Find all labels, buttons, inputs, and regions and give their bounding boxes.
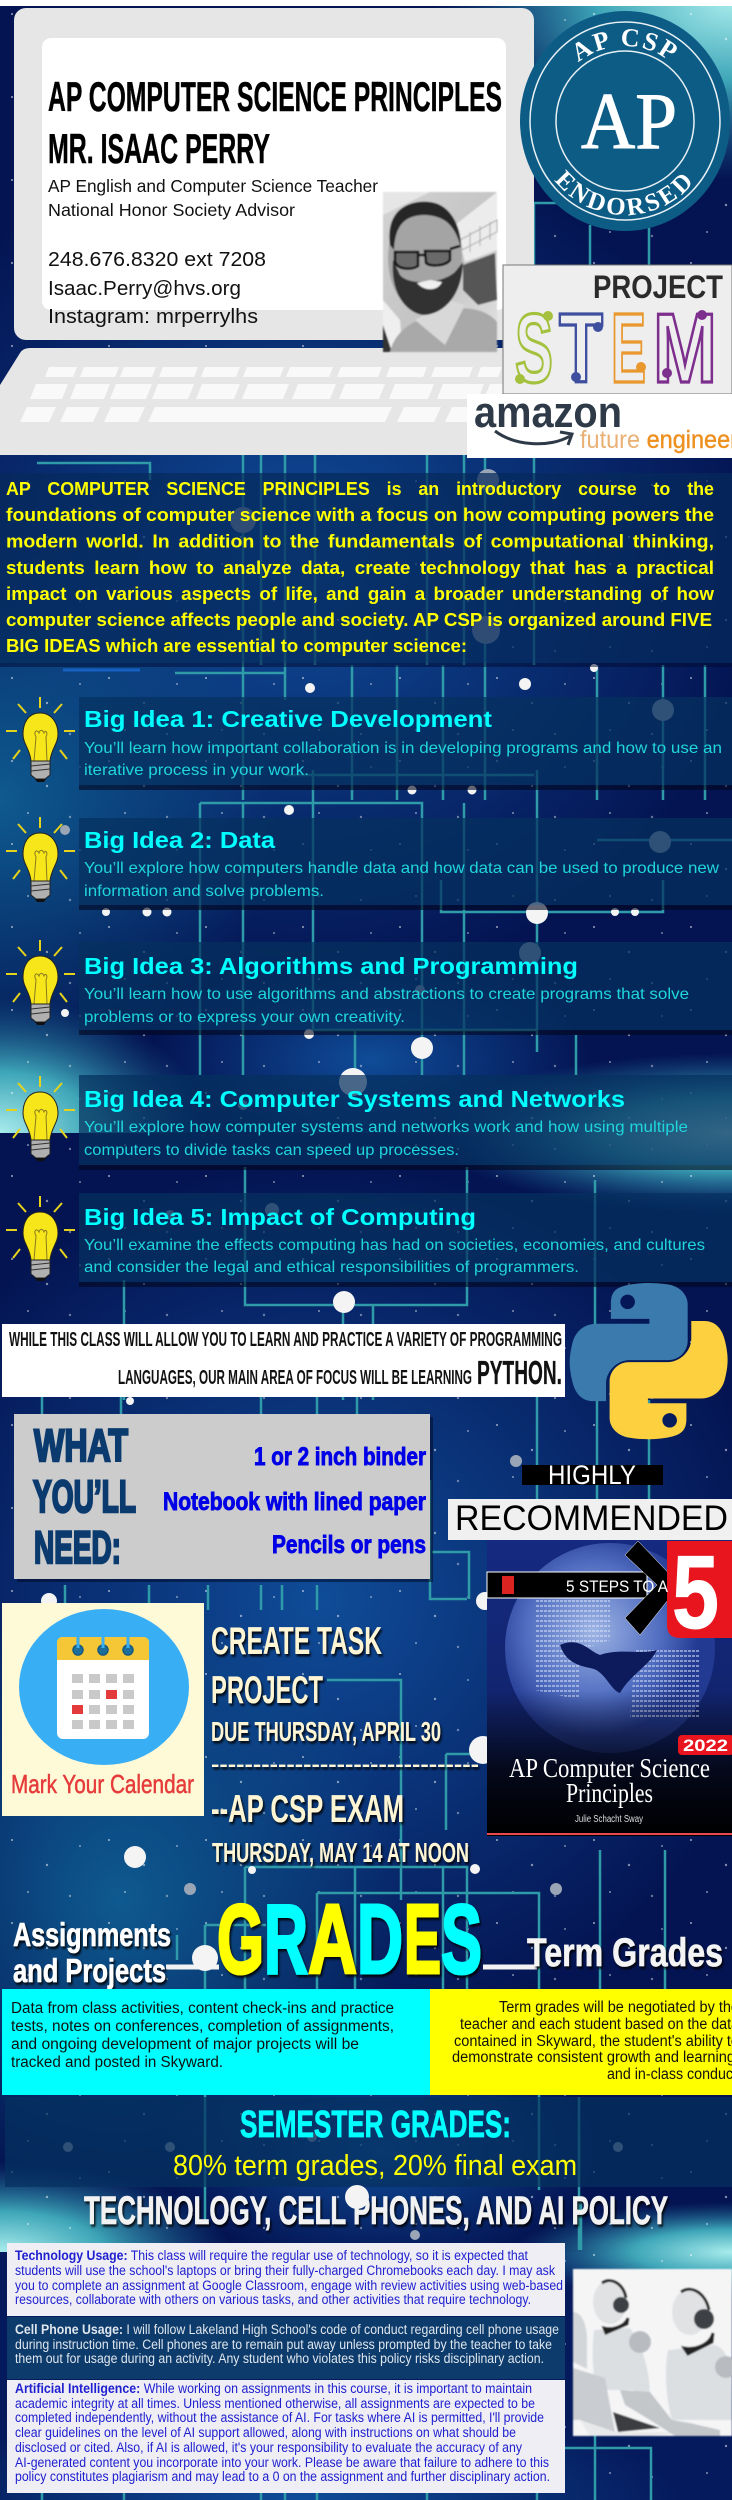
laptop screen inner white area	[42, 38, 506, 310]
heading: grades: D	[357, 1884, 403, 1994]
logo text: STEM letters: E	[611, 293, 646, 403]
panel: course introduction	[0, 473, 732, 667]
list: supplies: Pencils or pens	[272, 1531, 426, 1559]
panel: Python statement: LANGUAGES, OUR MAIN AREA OF FOCUS WILL BE LEARNING	[118, 1367, 472, 1389]
heading: Big Idea 3: Big Idea 3: Algorithms and Programming	[84, 953, 578, 979]
text block: key dates: THURSDAY, MAY 14 AT NOON	[212, 1837, 469, 1868]
text: Big Idea 5 description	[84, 1237, 705, 1276]
panel: laptop illustration	[0, 8, 540, 455]
text: Big Idea 1 description: iterative process in your work.	[84, 762, 309, 779]
heading: what you'll need: YOU’LL	[33, 1471, 136, 1522]
text: Big Idea 1 description: You’ll learn how important collaboration is in developing programs and how to use an	[84, 740, 722, 757]
panel: Big Idea 3	[6, 940, 732, 1035]
heading: Big Idea 2: Big Idea 2: Data	[84, 827, 275, 853]
panel: cell phone usage	[7, 2317, 565, 2379]
panel: course introduction: computer science affects people and society. AP CSP is organized around FIVE	[6, 610, 712, 630]
heading: Big Idea 4: Big Idea 4: Computer Systems and Networks	[84, 1086, 625, 1112]
list: supplies: 1 or 2 inch binder	[254, 1443, 426, 1471]
robot one	[593, 2280, 651, 2395]
panel: technology usage: you to complete an assignment at Google Classroom, engage with review activities using web-based	[15, 2278, 563, 2293]
logo dots	[515, 310, 707, 384]
heading: what you'll need: NEED:	[34, 1522, 121, 1573]
book year tag: 2022	[683, 1736, 728, 1755]
list: supplies	[163, 1443, 426, 1559]
text block: teacher contact details: 248.676.8320 ext 7208	[48, 249, 266, 271]
panel: what you'll need	[14, 1414, 433, 1582]
icon: light bulb	[6, 940, 75, 1025]
panel: Python statement	[2, 1324, 565, 1397]
badge text: AP CSP: AP CSP	[576, 29, 677, 62]
panel: technology usage: resources, collaborate with others on various tasks, and other activities that require technology.	[15, 2292, 531, 2307]
icon: light bulb	[6, 817, 75, 902]
panel: Big Idea 5	[6, 1193, 732, 1287]
panel: artificial intelligence: Artificial Intelligence: While working on assignments in this course, it is important to maintain	[15, 2381, 532, 2396]
heading: grades	[217, 1884, 482, 1994]
label: highly	[522, 1460, 663, 1490]
heading: grades: R	[264, 1884, 308, 1994]
panel: artificial intelligence: policy constitutes plagiarism and may lead to a 0 on the assignment and further disciplinary action.	[15, 2469, 550, 2484]
text: Big Idea 4 description: computers to divide tasks can speed up processes.	[84, 1142, 459, 1159]
heading: what you'll need	[33, 1420, 136, 1573]
list: supplies: Notebook with lined paper	[163, 1488, 426, 1516]
text: Big Idea 4 description	[84, 1119, 688, 1159]
panel: term grades	[430, 1989, 732, 2095]
icon: light bulb	[6, 697, 75, 782]
panel: assignments and projects: Data from class activities, content check-ins and practice	[11, 2000, 394, 2017]
panel: cell phone usage: them out for usage during an activity. Any student who violates this policy risks disciplinary action.	[15, 2351, 544, 2366]
text: Big Idea 1 description	[84, 740, 722, 779]
text: Big Idea 3 description	[84, 986, 689, 1026]
book title: Principles	[566, 1778, 653, 1808]
icon: light bulb	[6, 1076, 75, 1161]
book text: 5 steps to a: 5 STEPS TO A	[566, 1577, 669, 1596]
text: Big Idea 5 description: You’ll examine the effects computing has had on societies, economies, and cultures	[84, 1237, 705, 1254]
text: mark your calendar: Mark Your Calendar	[11, 1769, 194, 1799]
panel: artificial intelligence: disclosed or cited. Also, if AI is allowed, it's your responsibility to evaluate the accuracy of any	[15, 2440, 522, 2455]
heading: semester grades: SEMESTER GRADES:	[240, 2104, 511, 2146]
badge: AP CSP endorsed	[520, 11, 730, 231]
heading: assignments and projects: Assignments	[13, 1916, 171, 1953]
text block: teacher contact details	[48, 176, 378, 328]
book cover: 5 Steps to a 5	[487, 1535, 732, 1836]
book author: Julie Schacht Sway	[575, 1814, 643, 1825]
label: recommended: RECOMMENDED	[455, 1499, 728, 1538]
text block: teacher contact details: National Honor Society Advisor	[48, 200, 295, 220]
book number: 5: 5	[672, 1535, 719, 1651]
panel: course introduction: modern world. In addition to the fundamentals of computational thinking,	[6, 532, 714, 552]
panel: course introduction: BIG IDEAS which are essential to computer science:	[6, 636, 467, 656]
panel: artificial intelligence: academic integrity at all times. Unless mentioned otherwise, all assignments are expected to be	[15, 2396, 535, 2411]
panel: assignments and projects: and ongoing development of major projects will be	[11, 2036, 359, 2053]
heading: Big Idea 5: Big Idea 5: Impact of Computing	[84, 1204, 476, 1230]
icon: amazon smile	[495, 431, 572, 445]
logo text: STEM letters: S	[515, 293, 553, 403]
panel: Python statement: PYTHON.	[477, 1354, 562, 1391]
icon: calendar	[57, 1632, 149, 1739]
panel: cell phone usage: during instruction time. Cell phones are to remain put away unless prompted by the teacher to take	[15, 2337, 552, 2352]
panel: assignments and projects: tests, notes on conferences, completion of assignments,	[11, 2018, 394, 2035]
text block: teacher contact details: Isaac.Perry@hvs.org	[48, 278, 241, 300]
panel: Big Idea 4	[6, 1075, 732, 1170]
text block: key dates: PROJECT	[211, 1669, 323, 1712]
text: Big Idea 5 description: and consider the legal and ethical responsibilities of programmers.	[84, 1259, 579, 1276]
icon: Python logo	[570, 1283, 728, 1439]
image: robots at laptops	[573, 2269, 732, 2436]
heading: Big Idea 1: Big Idea 1: Creative Development	[84, 706, 492, 732]
panel: artificial intelligence: completed independently, without the assistance of AI. For tasks where AI is permitted, I'll provide	[15, 2410, 544, 2425]
heading: assignments and projects: and Projects	[13, 1952, 166, 1989]
panel: technology usage: Technology Usage: This class will require the regular use of technology, so it is expected that	[15, 2248, 528, 2263]
text: Big Idea 3 description: You’ll learn how to use algorithms and abstractions to create programs that solve	[84, 986, 689, 1003]
text: Big Idea 4 description: You’ll explore how computer systems and networks work and how using multiple	[84, 1119, 688, 1136]
heading: what you'll need: WHAT	[34, 1420, 128, 1471]
panel: artificial intelligence	[7, 2380, 565, 2493]
panel: artificial intelligence: AI-generated content you incorporate into your work. Please be aware that failure to adhere to this	[15, 2455, 549, 2470]
logo: Amazon Future Engineer	[467, 388, 732, 458]
panel: technology usage	[7, 2243, 565, 2316]
heading: grades: E	[404, 1884, 441, 1994]
panel: course introduction: students learn how to analyze data, create technology that has a practical	[6, 558, 714, 578]
heading: assignments and projects	[13, 1916, 171, 1989]
panel: assignments and projects	[2, 1989, 430, 2095]
text: Big Idea 2 description: information and solve problems.	[84, 883, 324, 900]
book year tag	[678, 1735, 732, 1755]
label: highly: HIGHLY	[548, 1460, 636, 1490]
panel: mark your calendar	[2, 1603, 204, 1816]
book title	[509, 1753, 710, 1808]
laptop screen	[14, 8, 534, 340]
keyboard keys	[20, 367, 506, 422]
icon: light bulb	[6, 1196, 75, 1281]
logo text: amazon: amazon	[474, 388, 622, 437]
photo: teacher portrait	[383, 192, 497, 352]
panel: cell phone usage: Cell Phone Usage: I will follow Lakeland High School's code of conduct regarding cell phone usage	[15, 2322, 559, 2337]
text block: teacher contact details: AP English and Computer Science Teacher	[48, 176, 378, 196]
panel: course introduction: AP COMPUTER SCIENCE PRINCIPLES is an introductory course to the	[6, 479, 714, 499]
text block: key dates: DUE THURSDAY, APRIL 30	[211, 1716, 441, 1747]
logo text: STEM letters: T	[559, 293, 603, 403]
robot left edge	[573, 2312, 587, 2369]
laptop base	[0, 348, 540, 455]
panel: course introduction: impact on various aspects of life, and gain a broader understanding of how	[6, 584, 715, 604]
text: Big Idea 2 description	[84, 860, 719, 900]
logo: Project STEM	[503, 265, 732, 403]
heading: grades: G	[217, 1884, 264, 1994]
panel: semester grades	[5, 2097, 732, 2187]
panel: assignments and projects: tracked and posted in Skyward.	[11, 2054, 223, 2071]
text: Big Idea 2 description: You’ll explore how computers handle data and how data can be used to produce new	[84, 860, 719, 877]
text block: key dates: --AP CSP EXAM	[211, 1788, 404, 1831]
text block: key dates: --------------------------------	[211, 1754, 479, 1776]
panel: Big Idea 1	[6, 697, 732, 790]
heading: grades: S	[441, 1884, 482, 1994]
heading: grades: A	[308, 1884, 357, 1994]
laptop and hands	[573, 2368, 720, 2436]
text block: key dates	[211, 1620, 479, 1868]
robot two	[666, 2289, 732, 2420]
panel: technology usage: students will use the school's laptops or bring their fully-charged Chromebooks each day. I may ask	[15, 2263, 555, 2278]
logo text: STEM letters	[515, 293, 717, 403]
badge text: AP: AP	[581, 78, 677, 166]
text: Big Idea 3 description: problems or to express your own creativity.	[84, 1009, 405, 1026]
text block: key dates: CREATE TASK	[211, 1620, 382, 1663]
title: teacher name: MR. ISAAC PERRY	[48, 125, 270, 172]
text block: teacher contact details: Instagram: mrperrylhs	[48, 306, 258, 328]
panel: artificial intelligence: clear guidelines on the level of AI support allowed, along with instructions on what should be	[15, 2425, 516, 2440]
panel: course introduction: foundations of computer science with a focus on how computing powers the	[6, 505, 714, 525]
panel: Big Idea 2	[6, 817, 732, 910]
badge text: ENDORSED: ENDORSED	[554, 169, 690, 216]
text: grade weighting: 80% term grades, 20% final exam	[173, 2150, 577, 2182]
